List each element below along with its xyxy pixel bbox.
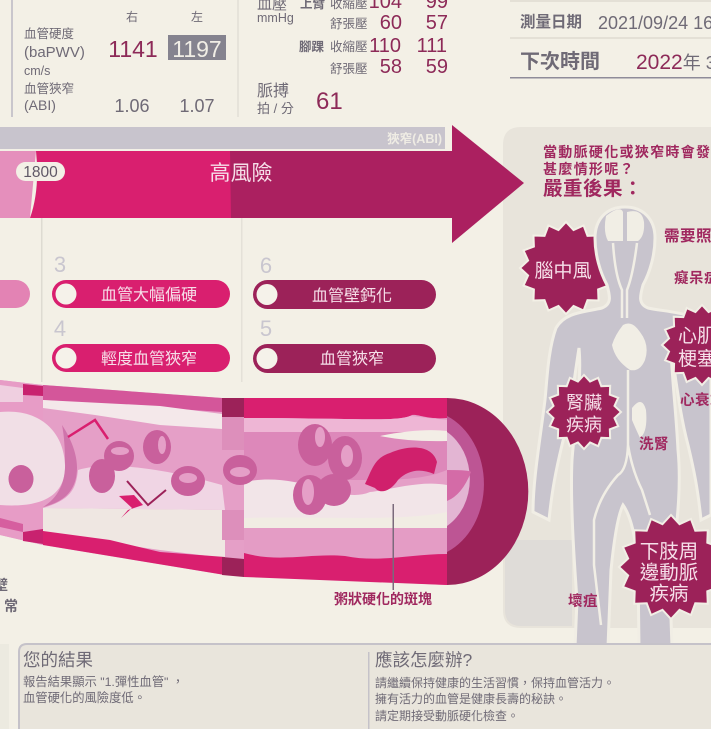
panel: blood pressure and pulse: 57 bbox=[426, 12, 448, 34]
panel: blood pressure and pulse: 腳踝 bbox=[299, 40, 325, 54]
pill: severe stiffening bbox=[52, 280, 230, 308]
burst: stroke bbox=[520, 222, 612, 314]
cropped label: left edge: 常 bbox=[4, 598, 18, 614]
panel: vessel stiffness readings: cm/s bbox=[24, 64, 50, 78]
illustration: artery cross-section bbox=[0, 380, 528, 607]
burst: myocardial infarction bbox=[662, 305, 711, 385]
text block: what to do: 請繼續保持健康的生活習慣，保持血管活力。 bbox=[375, 675, 615, 690]
pills: symptom stages: 6 bbox=[260, 253, 272, 278]
panel: vessel stiffness readings: 血管狹窄 bbox=[24, 81, 74, 96]
scale bar: narrowing (ABI): 狹窄(ABI) bbox=[387, 131, 442, 146]
panel: results and advice bbox=[0, 644, 711, 729]
text block: what to do: 應該怎麼辦? bbox=[375, 650, 472, 670]
burst: kidney disease: 疾病 bbox=[566, 415, 602, 435]
kidney bbox=[632, 402, 646, 438]
panel: measurement dates bbox=[510, 0, 711, 78]
text block: what to do: 擁有活力的血管是健康長壽的秘訣。 bbox=[375, 691, 567, 706]
text block: your result: 血管硬化的風險度低。 bbox=[23, 690, 146, 705]
panel: blood pressure and pulse: 61 bbox=[316, 88, 343, 115]
labels: symptoms: 洗腎 bbox=[639, 435, 669, 453]
atherosclerotic plaque bbox=[365, 448, 437, 491]
red blood cells bbox=[89, 424, 362, 515]
panel: vessel stiffness readings bbox=[24, 9, 226, 116]
heading: consequences: 嚴重後果： bbox=[543, 178, 643, 200]
panel: vessel stiffness readings: 左 bbox=[191, 9, 203, 24]
panel: blood pressure and pulse: 舒張壓 bbox=[330, 17, 368, 31]
segment C: band bbox=[222, 398, 244, 577]
panel: measurement dates: 下次時間 bbox=[520, 50, 600, 73]
scale bar: narrowing (ABI) bbox=[0, 127, 445, 149]
segment B: vessel lumen bbox=[43, 385, 225, 575]
arrow: flow rebound bbox=[127, 481, 166, 505]
text block: what to do bbox=[375, 650, 615, 723]
burst label: stroke: 腦中風 bbox=[534, 260, 592, 282]
panel: vessel stiffness readings: 1.07 bbox=[179, 96, 215, 116]
panel: serious consequences bbox=[503, 127, 711, 647]
panel: blood pressure and pulse: 拍 / 分 bbox=[257, 101, 294, 116]
burst: peripheral arterial disease: 疾病 bbox=[649, 583, 689, 605]
pill: narrowing bbox=[253, 344, 436, 373]
pill: wall calcification: 血管壁鈣化 bbox=[312, 286, 392, 305]
arrow: damage mark bbox=[119, 495, 143, 518]
text block: your result: 您的結果 bbox=[23, 650, 93, 670]
callout: atherosclerotic plaque: 粥狀硬化的斑塊 bbox=[334, 591, 432, 607]
risk arrow bbox=[0, 125, 524, 243]
segment A wall and plaque bbox=[0, 380, 77, 545]
heading: high risk: 高風險 bbox=[210, 162, 272, 185]
burst: peripheral arterial disease: 下肢周 bbox=[640, 541, 698, 563]
value pill: 1800: 1800 bbox=[23, 164, 58, 181]
panel: blood pressure and pulse: mmHg bbox=[257, 11, 294, 25]
end cap of artery bbox=[447, 398, 528, 585]
brain bbox=[605, 209, 644, 241]
arrow: flow strikes wall bbox=[68, 420, 108, 439]
pill: mild narrowing: 輕度血管狹窄 bbox=[101, 349, 197, 368]
cropped label: left edge bbox=[0, 577, 18, 614]
burst: kidney disease bbox=[547, 375, 621, 449]
panel: vessel stiffness readings: 右 bbox=[126, 9, 138, 24]
pills: symptom stages: 3 bbox=[54, 252, 66, 277]
pill: mild narrowing bbox=[52, 344, 230, 372]
pills: symptom stages bbox=[0, 252, 436, 373]
panel: blood pressure and pulse: 舒張壓 bbox=[330, 62, 368, 76]
blood vessels bbox=[594, 243, 650, 625]
panel: measurement dates: 2021/09/24 16 bbox=[598, 13, 711, 33]
panel: blood pressure and pulse: 58 bbox=[380, 56, 402, 78]
text block: your result: 報告結果顯示 "1.彈性血管" ， bbox=[23, 674, 184, 689]
panel: blood pressure and pulse: 脈搏 bbox=[257, 82, 289, 100]
panel: vessel stiffness readings: 血管硬度 bbox=[24, 26, 75, 41]
blood cell highlights bbox=[111, 427, 353, 505]
artery body base bbox=[0, 380, 447, 585]
panel: vessel stiffness readings: 1197 bbox=[172, 36, 222, 62]
panel: blood pressure and pulse: 收縮壓 bbox=[330, 39, 368, 54]
text block: your result bbox=[23, 650, 184, 705]
panel: vessel stiffness readings: 1141 bbox=[108, 36, 158, 62]
burst: kidney disease: 腎臟 bbox=[566, 393, 602, 413]
heart bbox=[612, 324, 647, 370]
panel: vessel stiffness readings: 1.06 bbox=[114, 96, 150, 116]
pill: severe stiffening: 血管大幅偏硬 bbox=[101, 285, 197, 304]
panel: vessel stiffness readings: (ABI) bbox=[24, 97, 56, 113]
pill: narrowing: 血管狹窄 bbox=[320, 349, 384, 368]
pill: wall calcification bbox=[253, 280, 436, 309]
panel: measurement dates: 測量日期 bbox=[520, 13, 582, 31]
callout: atherosclerotic plaque bbox=[334, 504, 432, 607]
heading: consequences bbox=[543, 144, 711, 200]
pills: symptom stages: 4 bbox=[54, 316, 66, 341]
panel: blood pressure and pulse: 110 bbox=[369, 35, 401, 57]
panel: blood pressure and pulse bbox=[257, 0, 448, 116]
text block: what to do: 請定期接受動脈硬化檢查。 bbox=[375, 708, 519, 723]
burst: peripheral arterial disease bbox=[619, 515, 711, 619]
labels: symptoms: 壞疽 bbox=[568, 592, 598, 610]
pills: symptom stages: 5 bbox=[260, 316, 272, 341]
panel: blood pressure and pulse: 60 bbox=[380, 12, 402, 34]
segment D: narrowed vessel bbox=[244, 398, 447, 585]
value pill: 1800 bbox=[16, 162, 65, 181]
labels: symptoms bbox=[568, 227, 711, 610]
human figure bbox=[533, 207, 711, 647]
panel: blood pressure and pulse: 59 bbox=[426, 56, 448, 78]
heading: consequences: 甚麼情形呢？ bbox=[543, 161, 635, 177]
panel: blood pressure and pulse: 111 bbox=[417, 35, 447, 57]
burst: peripheral arterial disease: 邊動脈 bbox=[640, 562, 698, 584]
panel: vessel stiffness readings: (baPWV) bbox=[24, 44, 85, 61]
